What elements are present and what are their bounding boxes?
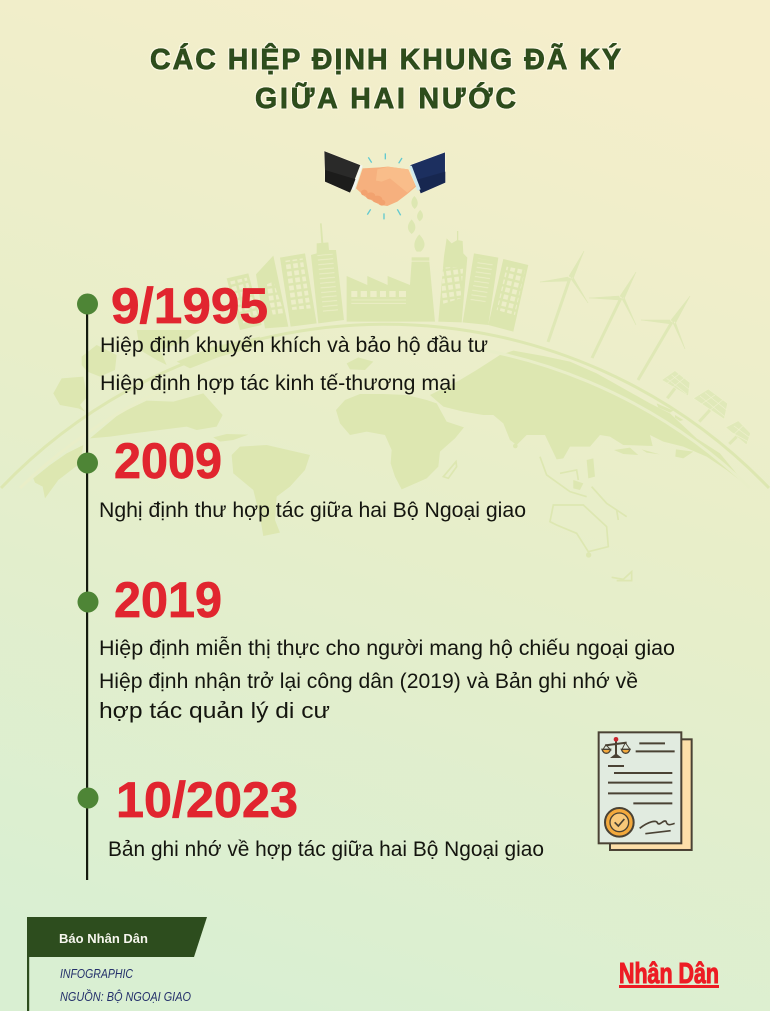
timeline entry: 9/1995: 9/1995 xyxy=(111,278,268,334)
footer credit: INFOGRAPHIC xyxy=(60,967,134,981)
timeline entry: 2019 xyxy=(78,572,675,723)
timeline entry: 2019: Hiệp định nhận trở lại công dân (2019) và Bản ghi nhớ về xyxy=(99,670,638,693)
logo: Nhân Dân: Nhân Dân xyxy=(619,958,719,990)
timeline entry: 10/2023 xyxy=(78,772,544,861)
city skyline and factory xyxy=(227,223,528,332)
footer credit xyxy=(27,917,207,1011)
solar panels xyxy=(662,371,751,445)
timeline entry: 10/2023: 10/2023 xyxy=(116,772,298,828)
globe outline arcs xyxy=(1,324,769,488)
title: CÁC HIỆP ĐỊNH KHUNG ĐÃ KÝ xyxy=(150,44,621,76)
timeline entry: 9/1995 xyxy=(77,278,488,395)
world map: eastern landmasses xyxy=(336,351,746,581)
illustration: green globe with city skyline xyxy=(1,196,769,581)
title: GIỮA HAI NƯỚC xyxy=(255,83,516,115)
icon: handshake xyxy=(324,151,445,219)
timeline entry: 2019: Hiệp định miễn thị thực cho người mang hộ chiếu ngoại giao xyxy=(99,637,675,660)
timeline entry: 2009: 2009 xyxy=(114,433,222,489)
footer credit: NGUỒN: BỘ NGOẠI GIAO xyxy=(60,989,191,1004)
timeline entry: 9/1995: Hiệp định hợp tác kinh tế-thương mại xyxy=(100,372,456,395)
timeline line xyxy=(86,304,88,880)
leaf drops xyxy=(408,196,425,252)
timeline entry: 10/2023: Bản ghi nhớ về hợp tác giữa hai Bộ Ngoại giao xyxy=(108,838,544,861)
timeline entry: 2009 xyxy=(77,433,526,522)
timeline entry: 2019: 2019 xyxy=(114,572,222,628)
icon: signed legal document xyxy=(599,732,692,850)
timeline entry: 9/1995: Hiệp định khuyến khích và bảo hộ đầu tư xyxy=(100,334,488,357)
world map: western landmasses xyxy=(33,330,310,536)
timeline entry: 2009: Nghị định thư hợp tác giữa hai Bộ Ngoại giao xyxy=(99,499,526,522)
icon rays xyxy=(367,153,402,219)
footer credit: Báo Nhân Dân xyxy=(59,932,148,946)
timeline entry: 2019: hợp tác quản lý di cư xyxy=(99,698,330,723)
title xyxy=(150,44,621,115)
wind turbines xyxy=(540,251,690,380)
